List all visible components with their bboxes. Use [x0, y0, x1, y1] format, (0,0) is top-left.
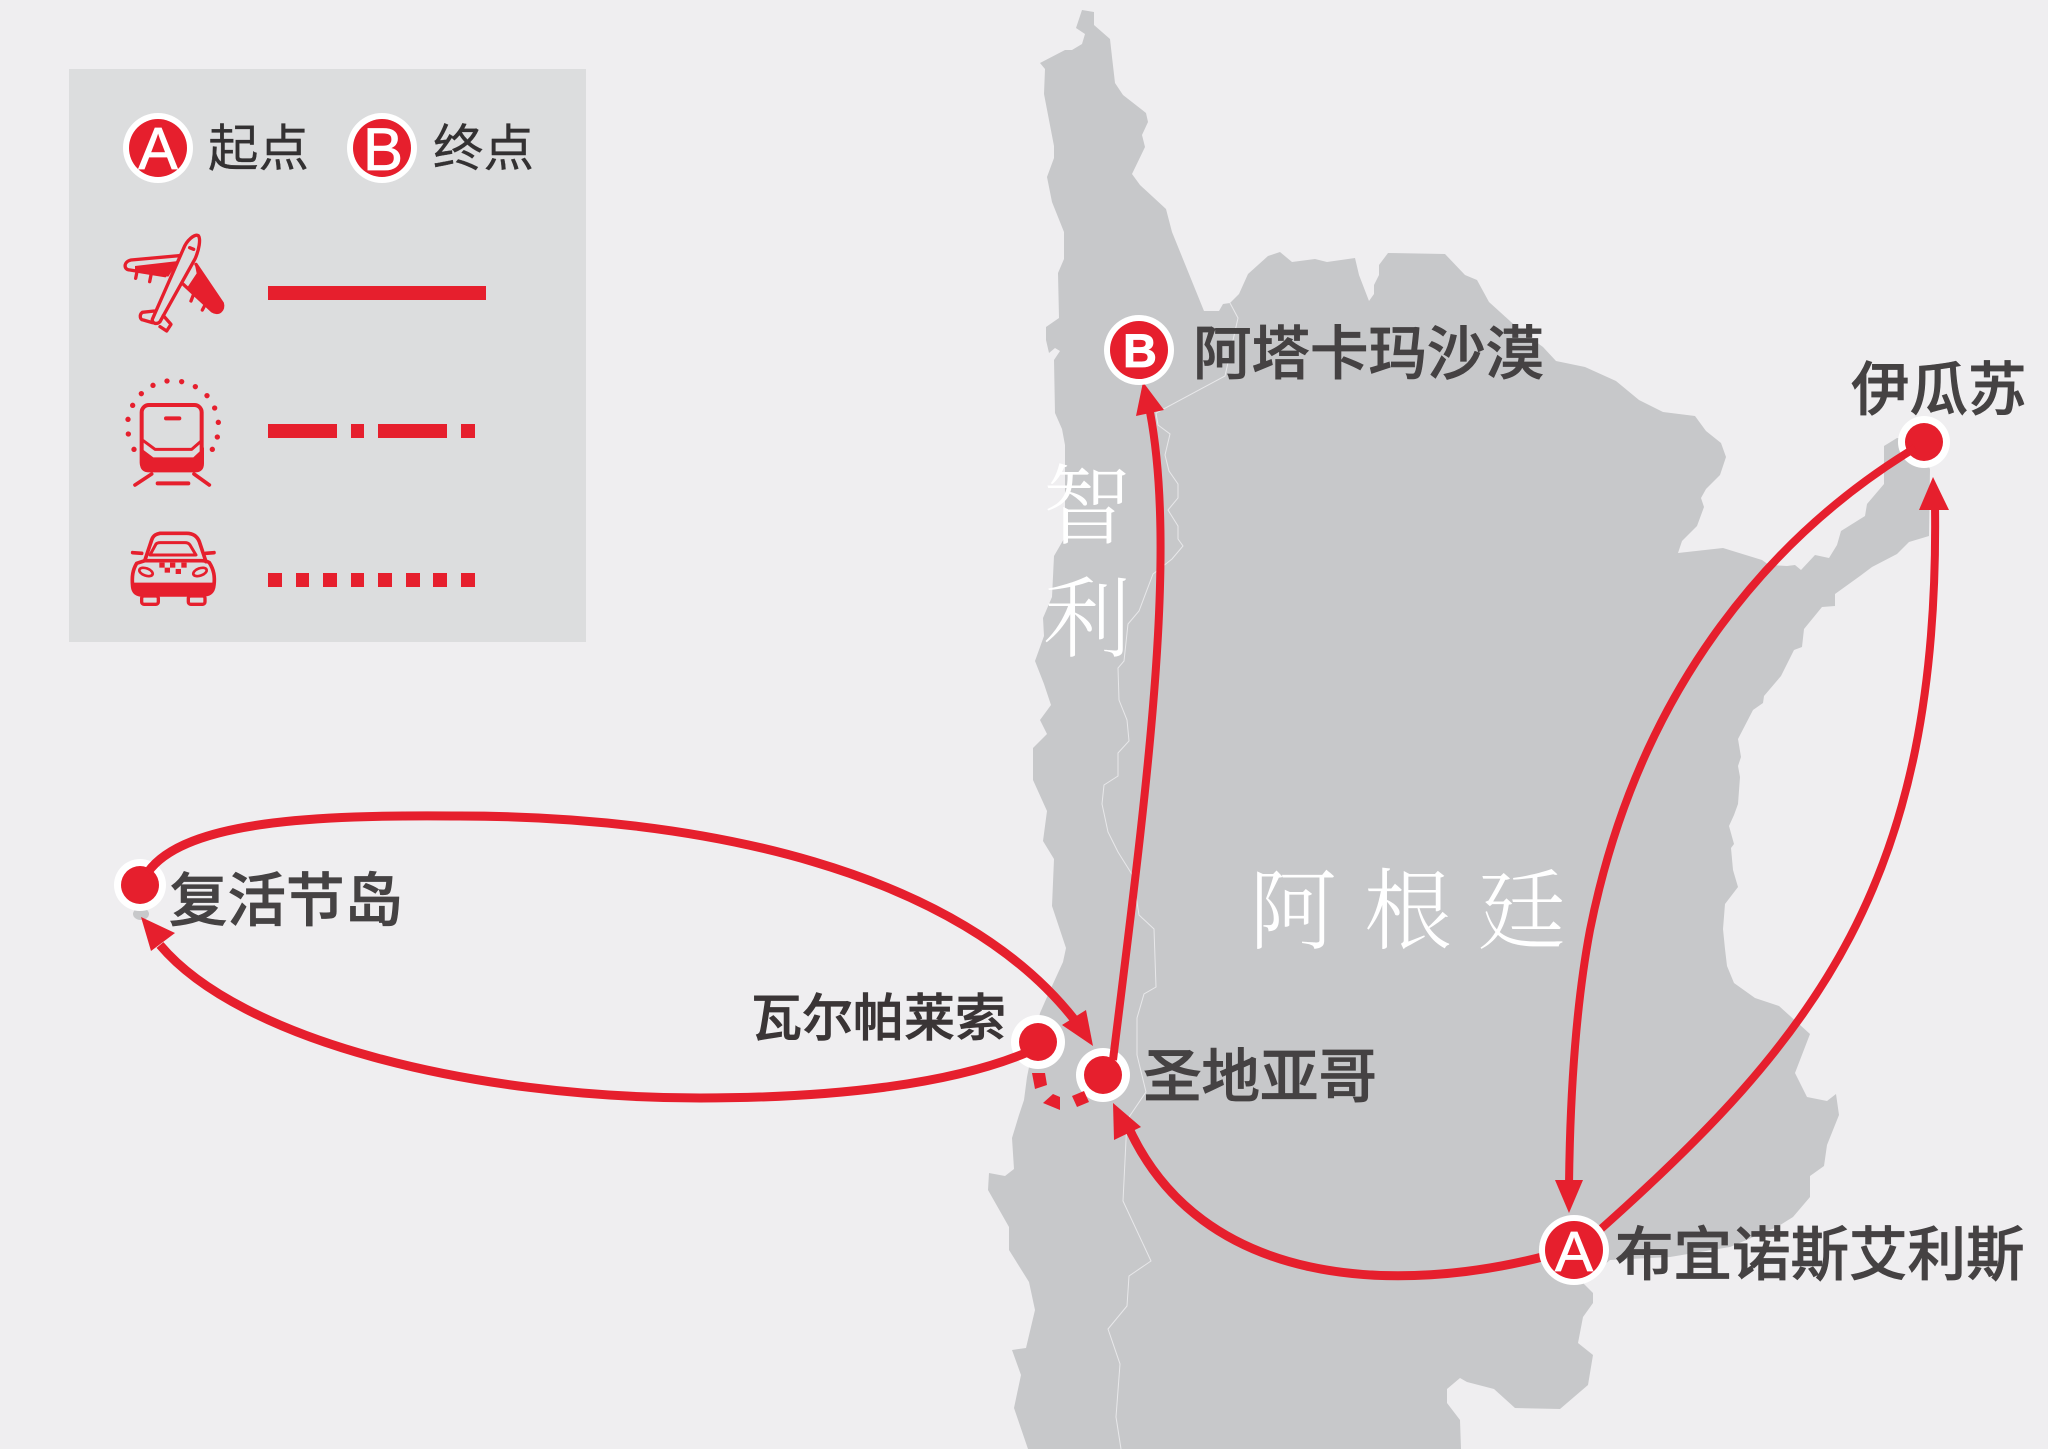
route: Iguazu to Buenos Aires — [1555, 448, 1915, 1213]
icon: taxi — [132, 533, 215, 604]
panel: legend — [69, 69, 586, 642]
label: Buenos Aires: 布宜诺斯艾利斯 — [1615, 1223, 2025, 1288]
icon: plane — [125, 235, 223, 331]
marker: Santiago — [1076, 1048, 1130, 1102]
country label: Chile — [1043, 460, 1131, 670]
marker: Iguazu — [1898, 416, 1950, 468]
icon: train — [125, 378, 221, 485]
legend: end marker — [347, 113, 534, 183]
marker: Valparaiso — [1011, 1015, 1065, 1069]
label: Santiago: 圣地亚哥 — [1143, 1045, 1377, 1110]
route: Santiago to Atacama — [1113, 382, 1164, 1060]
legend: start marker — [123, 113, 309, 183]
country label: Argentina: 阿 — [1249, 865, 1337, 962]
marker: Buenos Aires (A): A — [1555, 1220, 1593, 1284]
route: Buenos Aires to Iguazu — [1593, 477, 1949, 1236]
route: Santiago to Valparaiso by car — [1032, 1073, 1089, 1110]
marker: Buenos Aires (A) — [1539, 1215, 1609, 1285]
country label: Argentina: 根 — [1364, 865, 1452, 962]
marker: Atacama (B) — [1104, 315, 1174, 385]
route: Buenos Aires to Santiago — [1113, 1103, 1550, 1276]
legend: start marker: A — [138, 116, 178, 182]
legend line: car — [268, 573, 475, 587]
route: Easter Island to Santiago — [148, 816, 1093, 1046]
label: Valparaiso: 瓦尔帕莱索 — [751, 990, 1006, 1047]
country label: Chile: 利 — [1043, 573, 1131, 670]
legend: end marker: B — [363, 116, 403, 183]
label: Easter Island: 复活节岛 — [169, 869, 403, 934]
country label: Chile: 智 — [1043, 460, 1131, 557]
legend: end marker: 终点 — [433, 120, 534, 177]
route: Valparaiso to Easter Island — [141, 917, 1028, 1098]
legend: start marker: 起点 — [208, 120, 309, 177]
label: Atacama Desert: 阿塔卡玛沙漠 — [1193, 322, 1544, 387]
country label: Argentina: 廷 — [1478, 865, 1566, 962]
marker: Atacama (B): B — [1123, 324, 1157, 377]
marker: Easter Island — [114, 859, 166, 911]
country label: Argentina — [1249, 865, 1566, 962]
legend line: flight — [268, 286, 486, 300]
legend line: rail — [268, 424, 475, 438]
label: Iguazu: 伊瓜苏 — [1851, 358, 2027, 423]
